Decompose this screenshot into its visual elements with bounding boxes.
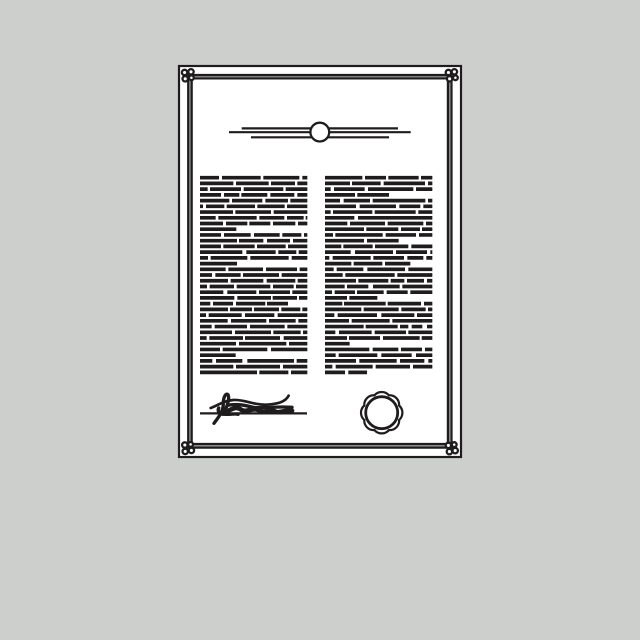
- corner ornament: top left: [182, 69, 194, 82]
- signature line: [200, 412, 307, 414]
- corner ornament: bottom right: [446, 442, 458, 454]
- signature block: [200, 394, 307, 423]
- signature scribble: [211, 394, 292, 423]
- left text column: [200, 178, 307, 372]
- ornament circle: [310, 123, 329, 142]
- right text column: [325, 178, 432, 372]
- seal inner circle: [366, 397, 398, 429]
- corner ornament: bottom left: [182, 442, 194, 454]
- ornament lines: [229, 128, 411, 137]
- double inner frame: [188, 75, 451, 448]
- seal scalloped edge: [361, 392, 402, 433]
- header ornament: [229, 123, 411, 142]
- certificate page: [179, 66, 461, 457]
- page outer border: [179, 66, 461, 457]
- wax seal: [361, 392, 402, 433]
- corner ornament: top right: [446, 69, 458, 82]
